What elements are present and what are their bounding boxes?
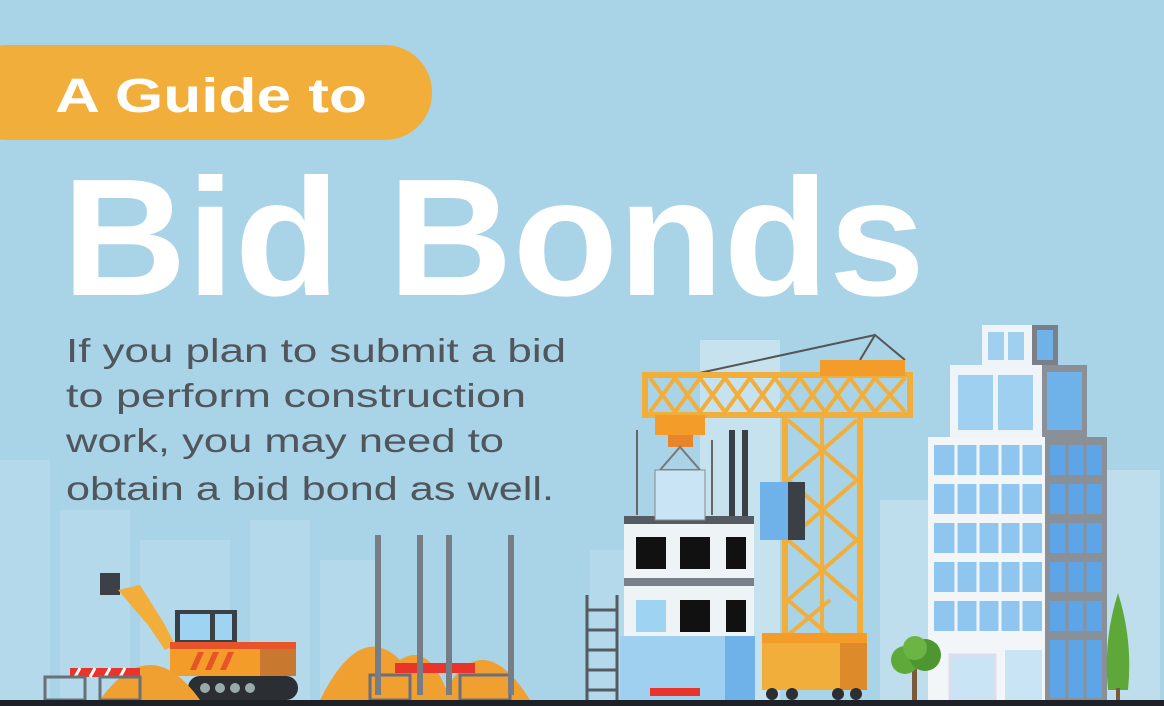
ground xyxy=(0,700,1164,706)
intro paragraph xyxy=(65,332,566,507)
title: Bid Bonds: Bid Bonds xyxy=(62,145,925,331)
trees xyxy=(891,593,1129,700)
intro paragraph: obtain a bid bond as well. xyxy=(66,470,554,507)
excavator xyxy=(100,573,298,700)
office tower xyxy=(928,325,1107,700)
title pill: A Guide to: A Guide to xyxy=(55,70,367,123)
crane xyxy=(645,335,910,700)
background city silhouettes xyxy=(0,340,1160,700)
ladder xyxy=(587,595,617,700)
intro paragraph: to perform construction xyxy=(66,377,526,414)
barriers and sand mounds left xyxy=(45,647,530,700)
intro paragraph: If you plan to submit a bid xyxy=(66,332,566,369)
piles xyxy=(375,535,514,695)
intro paragraph: work, you may need to xyxy=(65,422,504,459)
building under construction xyxy=(620,430,755,700)
title pill: A Guide to xyxy=(0,45,432,140)
